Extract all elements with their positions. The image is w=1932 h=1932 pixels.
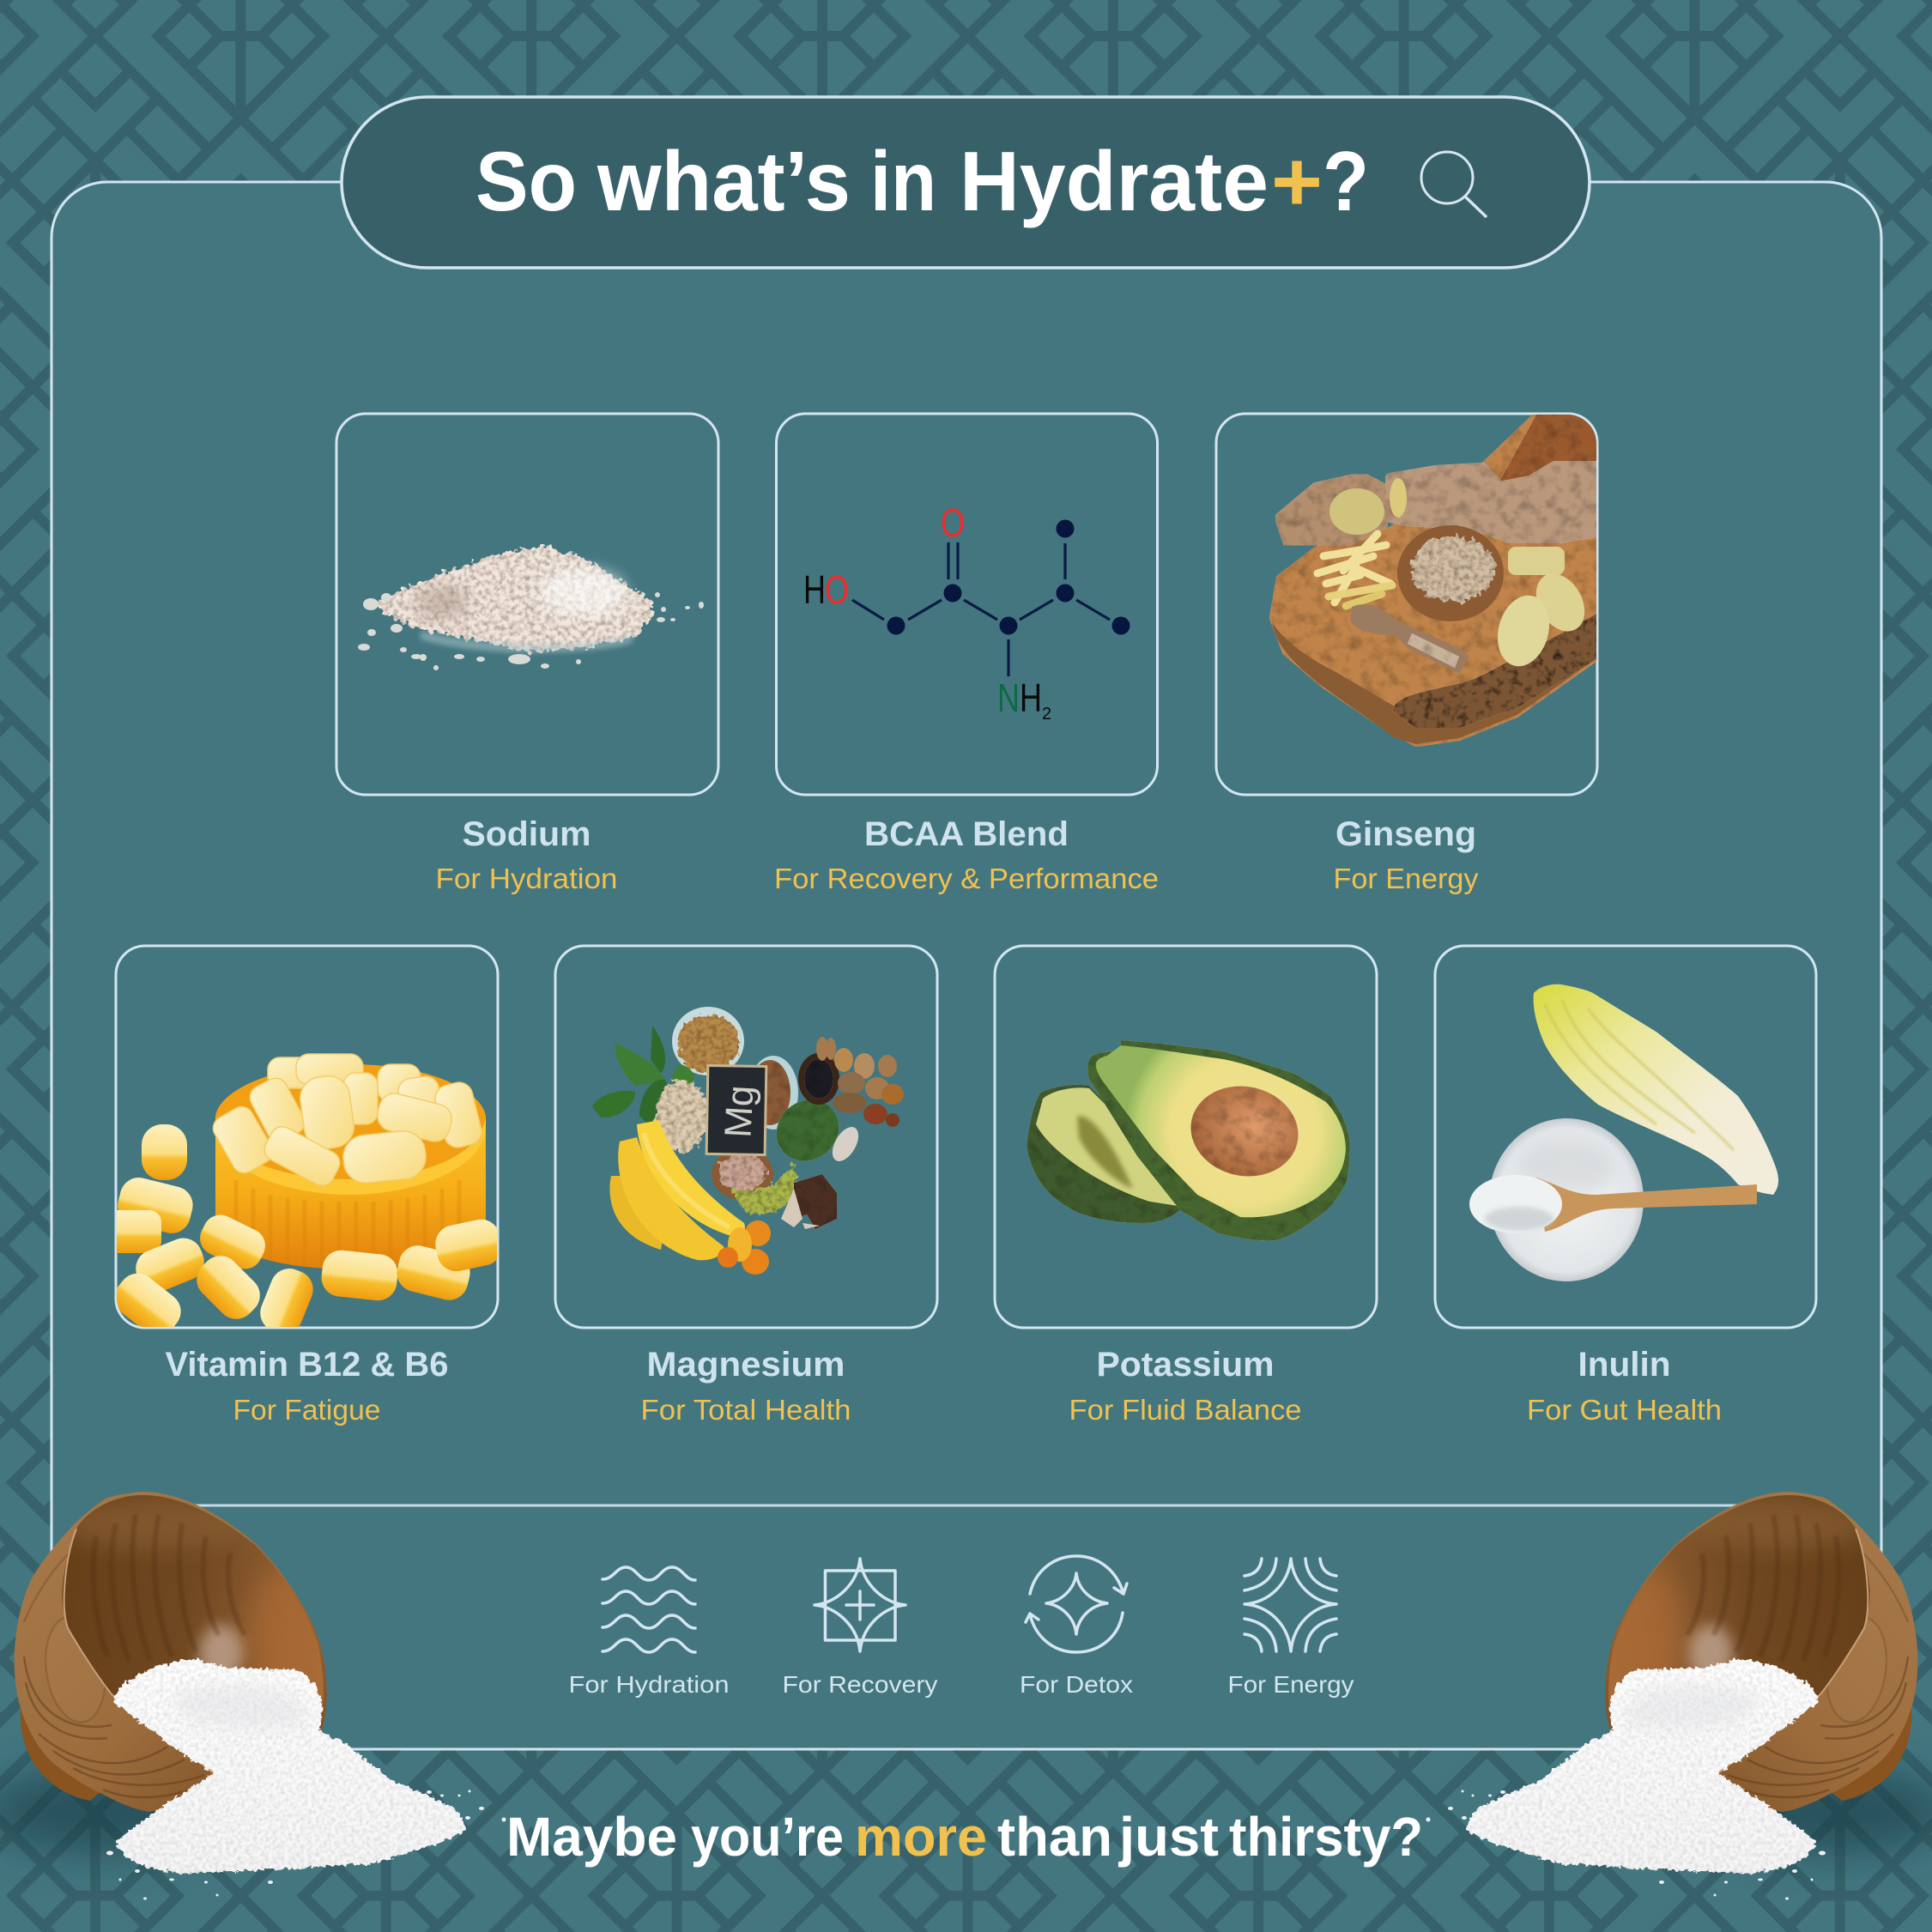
section divider (163, 1504, 1769, 1507)
bananas (609, 1176, 663, 1250)
tagline (506, 1806, 1423, 1868)
molecule diagram: 2 (1042, 705, 1051, 724)
sublabel: total health: For Total Health (640, 1394, 851, 1426)
ginger slices (1508, 547, 1565, 575)
tagline: Maybe (506, 1806, 677, 1868)
label: For Hydration (568, 1671, 730, 1698)
label: sodium: Sodium (462, 815, 591, 853)
card: potassium (995, 946, 1377, 1426)
label: ginseng: Ginseng (1335, 815, 1476, 853)
icon: cycle star (1026, 1556, 1127, 1652)
ginger matchsticks (1317, 534, 1392, 606)
magnesium foods photo (592, 1007, 904, 1275)
sublabel: fluid balance: For Fluid Balance (1069, 1394, 1301, 1426)
right salt bowl (1426, 1492, 1932, 1900)
benefit: recovery (783, 1559, 937, 1698)
label: inulin: Inulin (1578, 1346, 1670, 1384)
label: For Recovery (783, 1671, 937, 1698)
label: For Detox (1020, 1671, 1133, 1698)
tagline: than (997, 1806, 1112, 1868)
Mg sign: Mg (717, 1084, 762, 1139)
label: magnesium: Magnesium (647, 1346, 845, 1384)
title: + (1271, 134, 1323, 228)
benefit: detox (1020, 1556, 1133, 1698)
leaves (651, 1026, 665, 1073)
label: potassium: Potassium (1097, 1346, 1274, 1384)
vitamin pills photo (117, 1053, 497, 1327)
title: Hydrate (960, 134, 1269, 228)
card: BCAA blend (774, 414, 1159, 894)
nuts (816, 1037, 904, 1127)
title: what’s (597, 134, 851, 228)
salt pile photo (358, 546, 704, 670)
molecule diagram (803, 500, 1130, 724)
pile of pills (209, 1054, 484, 1190)
card: magnesium (555, 946, 937, 1426)
chocolate (794, 1174, 837, 1229)
molecule diagram: O (825, 567, 849, 612)
wooden scoop (1350, 604, 1469, 674)
oranges (745, 1220, 771, 1246)
left salt bowl (0, 1492, 506, 1900)
title: ? (1323, 134, 1369, 228)
tagline: thirsty? (1229, 1806, 1423, 1868)
sublabel: gut health: For Gut Health (1527, 1394, 1722, 1426)
card: sodium (336, 414, 718, 894)
molecule diagram: H (803, 567, 826, 612)
benefit: energy (1227, 1559, 1354, 1698)
title: So (475, 134, 577, 228)
tagline: just (1118, 1806, 1219, 1868)
main panel (51, 182, 1881, 1749)
wooden spoon (1536, 1178, 1757, 1232)
molecule diagram: O (941, 500, 965, 545)
ginger root (1390, 463, 1596, 541)
title: in (870, 134, 936, 228)
card: vitamin B12 and B6 (101, 946, 506, 1426)
chicory and powder photo (1469, 984, 1778, 1281)
tagline: more (855, 1806, 987, 1868)
icon: star with rays (1245, 1559, 1336, 1651)
icon: waves (603, 1567, 695, 1652)
sublabel: fatigue: For Fatigue (233, 1394, 381, 1426)
ginger board photo (1272, 415, 1596, 744)
avocado photo (1027, 1040, 1350, 1240)
icon: magnifier (1421, 152, 1487, 217)
card: inulin (1435, 946, 1816, 1426)
ginger powder bowl (1397, 525, 1504, 621)
label: BCAA blend: BCAA Blend (864, 815, 1069, 853)
label: vitamin: Vitamin B12 & B6 (165, 1346, 448, 1384)
loose pills (142, 1124, 187, 1180)
molecule diagram: N (997, 675, 1020, 720)
card: ginseng (1216, 414, 1597, 894)
sublabel: for hydration: For Hydration (436, 863, 618, 894)
powder dish (1489, 1118, 1644, 1281)
molecule diagram: H (1020, 675, 1042, 720)
tagline: you’re (691, 1806, 844, 1868)
title (475, 134, 1369, 228)
sublabel: energy: For Energy (1334, 863, 1479, 894)
icon: star in square (815, 1559, 905, 1651)
label: For Energy (1227, 1671, 1354, 1698)
title pill (342, 97, 1590, 268)
benefit: hydration (568, 1567, 730, 1698)
sublabel: recovery: For Recovery & Performance (774, 863, 1159, 894)
Mg sign (706, 1065, 766, 1155)
